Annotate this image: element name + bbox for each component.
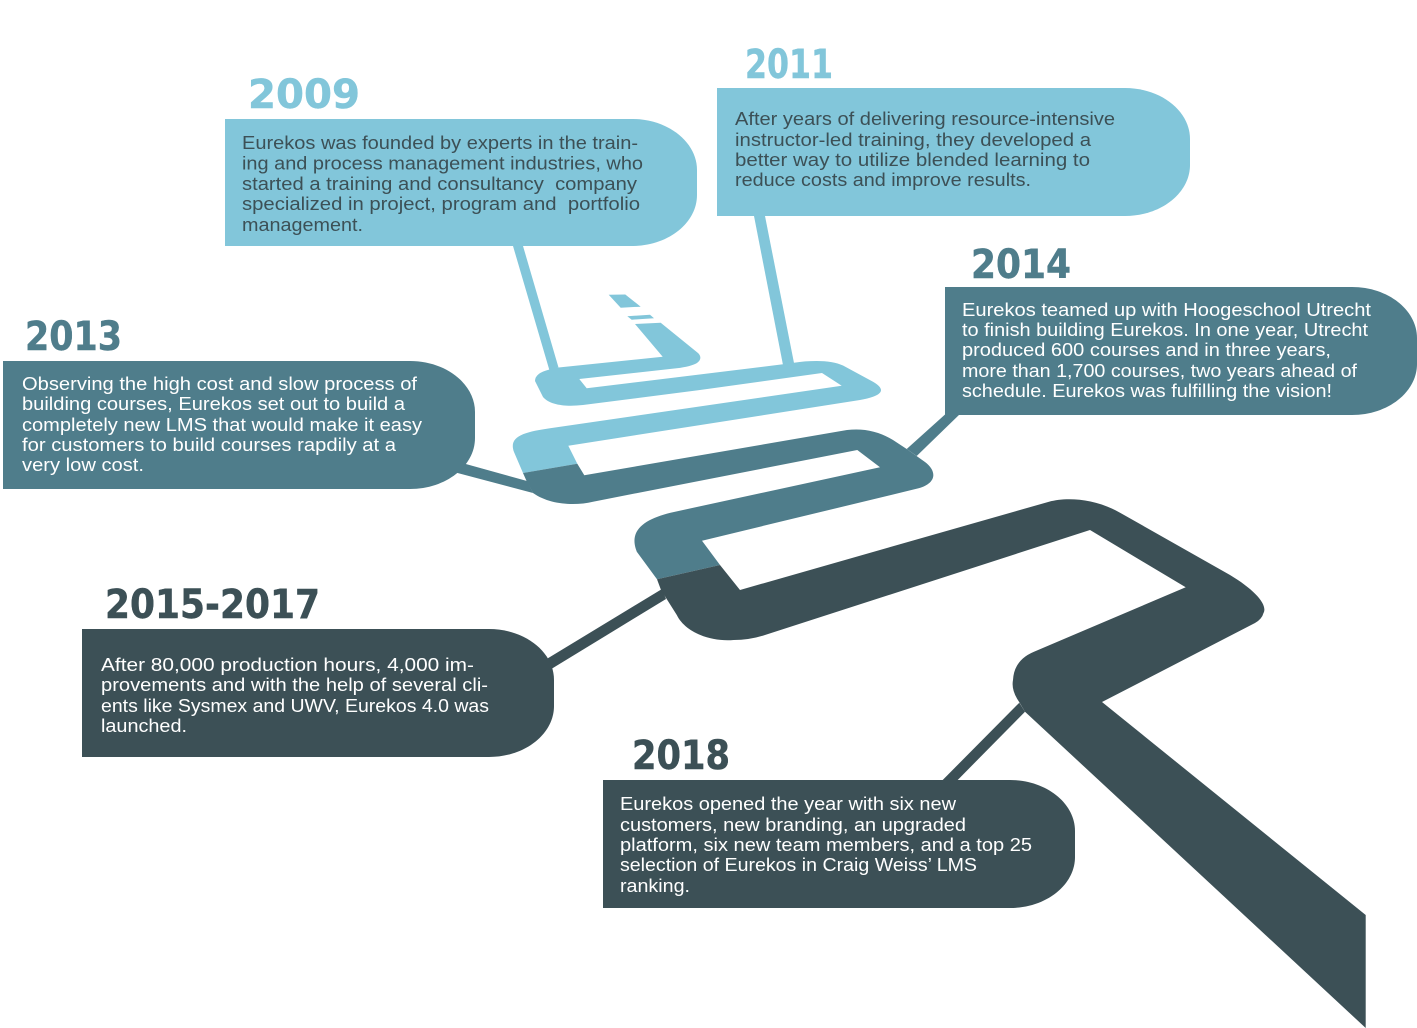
text 2013: very low cost. (22, 455, 144, 475)
callout 2015-2017 (82, 629, 554, 757)
milestone 2013 (3, 314, 533, 493)
milestone 2009 (225, 72, 697, 370)
year 2014: 2014 (971, 242, 1071, 288)
callout 2009 (225, 119, 697, 246)
text 2013: Observing the high cost and slow process of (22, 374, 418, 394)
text 2013: completely new LMS that would make it easy (22, 415, 422, 435)
year 2015-2017: 2015-2017 (105, 582, 320, 628)
year 2011: 2011 (745, 42, 833, 88)
text 2013: building courses, Eurekos set out to build a (22, 394, 406, 414)
text 2009: started a training and consultancy company (242, 174, 637, 194)
text 2015-2017: launched. (101, 716, 187, 736)
text 2011 (735, 109, 1115, 190)
text 2009: ing and process management industries, who (242, 154, 643, 174)
connector 2015-2017 (545, 589, 666, 671)
callout 2018 (603, 780, 1075, 908)
text 2018: platform, six new team members, and a top 25 (620, 835, 1032, 855)
text 2018 (620, 794, 1032, 896)
year 2009: 2009 (248, 72, 360, 118)
text 2009: specialized in project, program and portfolio (242, 194, 640, 214)
text 2011: better way to utilize blended learning to (735, 150, 1090, 170)
text 2014: Eurekos teamed up with Hoogeschool Utrecht (962, 300, 1371, 320)
milestone 2011 (717, 42, 1190, 365)
text 2015-2017: provements and with the help of several cli- (101, 675, 488, 695)
road: start marks light (609, 294, 654, 320)
text 2011: reduce costs and improve results. (735, 170, 1031, 190)
connector 2014 (907, 413, 961, 456)
text 2009: Eurekos was founded by experts in the train- (242, 133, 638, 153)
text 2014: schedule. Eurekos was fulfilling the vision! (962, 381, 1332, 401)
text 2018: customers, new branding, an upgraded (620, 815, 966, 835)
text 2018: Eurekos opened the year with six new (620, 794, 957, 814)
winding road (513, 294, 1366, 1028)
text 2015-2017 (101, 655, 489, 736)
callout 2014 (945, 287, 1417, 415)
connector 2011 (754, 216, 794, 365)
text 2009 (242, 133, 643, 235)
road: teal section (523, 429, 933, 579)
text 2013 (22, 374, 422, 475)
connector 2018 (942, 703, 1025, 781)
road: dark section (657, 499, 1366, 1028)
connector 2013 (450, 464, 533, 493)
text 2009: management. (242, 215, 363, 235)
text 2014 (962, 300, 1371, 401)
text 2014: more than 1,700 courses, two years ahead of (962, 361, 1358, 381)
milestone 2015-2017 (82, 582, 666, 757)
year 2018: 2018 (632, 733, 730, 779)
road: light section (513, 323, 881, 473)
text 2014: to finish building Eurekos. In one year, Utrecht (962, 320, 1368, 340)
callout 2013 (3, 361, 475, 489)
text 2011: instructor-led training, they developed a (735, 130, 1092, 150)
connector 2009 (513, 246, 558, 370)
text 2015-2017: ents like Sysmex and UWV, Eurekos 4.0 was (101, 696, 489, 716)
text 2013: for customers to build courses rapdily at a (22, 435, 397, 455)
milestone 2018 (603, 703, 1075, 908)
text 2014: produced 600 courses and in three years, (962, 340, 1331, 360)
callout 2011 (717, 88, 1190, 216)
text 2015-2017: After 80,000 production hours, 4,000 im- (101, 655, 474, 675)
text 2018: ranking. (620, 876, 690, 896)
milestone 2014 (907, 242, 1417, 456)
text 2011: After years of delivering resource-intensive (735, 109, 1115, 129)
text 2018: selection of Eurekos in Craig Weiss’ LMS (620, 855, 977, 875)
year 2013: 2013 (25, 314, 122, 360)
